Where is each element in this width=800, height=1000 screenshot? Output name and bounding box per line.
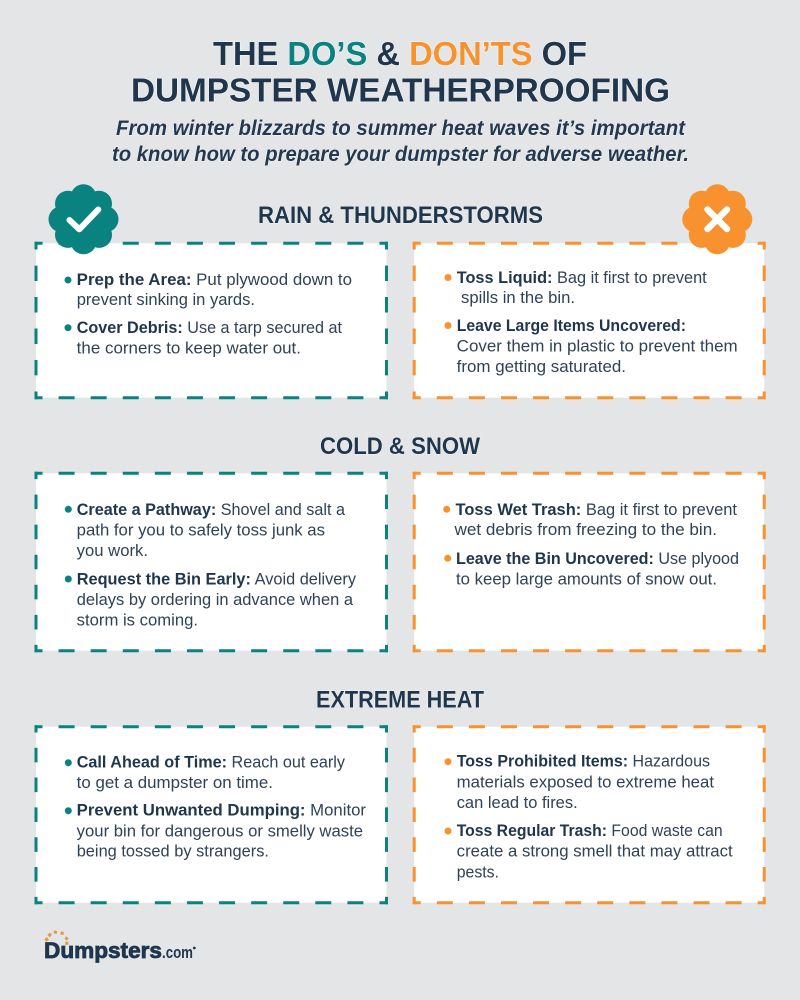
panel: rain don'ts: Leave Large Items Uncovered: bbox=[457, 316, 686, 335]
panel: cold do's: Create a Pathway: Shovel and salt a bbox=[77, 500, 346, 519]
logo: Dumpsters.com: .com bbox=[162, 943, 193, 962]
panel: rain do's: Cover Debris: Use a tarp secured at bbox=[77, 318, 342, 337]
panel: cold do's: you work. bbox=[77, 541, 148, 560]
panel: heat do's: to get a dumpster on time. bbox=[77, 773, 273, 792]
panel: rain don'ts: Cover them in plastic to prevent them bbox=[457, 336, 738, 355]
title bbox=[131, 36, 670, 110]
panel: heat don'ts: materials exposed to extreme heat bbox=[457, 772, 714, 791]
panel: rain do's: Prep the Area: Put plywood down to bbox=[77, 270, 352, 289]
panel: cold don'ts bbox=[413, 472, 766, 652]
panel: cold don'ts: wet debris from freezing to the bin. bbox=[453, 520, 717, 539]
title: THE DO’S & DON’TS OF bbox=[213, 36, 587, 73]
panel: heat don'ts: can lead to fires. bbox=[457, 793, 578, 812]
panel: heat do's bbox=[34, 725, 388, 904]
panel: cold don'ts: Leave the Bin Uncovered: Use plyood bbox=[456, 549, 739, 568]
panel: heat do's: being tossed by strangers. bbox=[77, 842, 269, 861]
panel: rain don'ts bbox=[413, 242, 766, 399]
panel: cold do's: storm is coming. bbox=[77, 611, 198, 630]
panel: cold do's bbox=[34, 472, 388, 652]
subtitle bbox=[112, 117, 689, 166]
icon: orange x badge bbox=[682, 184, 752, 254]
panel: heat don'ts: Toss Regular Trash: Food waste can bbox=[457, 821, 723, 840]
heading: rain and thunderstorms: RAIN & THUNDERSTORMS bbox=[258, 202, 543, 229]
logo: Dumpsters.com bbox=[44, 931, 196, 963]
panel: heat don'ts: pests. bbox=[457, 862, 499, 881]
panel: rain do's bbox=[34, 242, 388, 399]
panel: cold do's: path for you to safely toss junk as bbox=[77, 520, 325, 539]
panel: rain don'ts: from getting saturated. bbox=[457, 357, 626, 376]
panel: heat do's: Call Ahead of Time: Reach out early bbox=[77, 753, 346, 772]
heading: cold and snow: COLD & SNOW bbox=[320, 433, 481, 460]
panel: cold don'ts: to keep large amounts of snow out. bbox=[456, 569, 717, 588]
panel: cold don'ts: Toss Wet Trash: Bag it first to prevent bbox=[456, 500, 737, 519]
panel: heat don'ts: create a strong smell that may attract bbox=[457, 842, 733, 861]
logo: Dumpsters.com: Dumpsters bbox=[44, 938, 162, 963]
panel: rain don'ts: spills in the bin. bbox=[461, 288, 575, 307]
panel: cold do's: delays by ordering in advance when a bbox=[77, 590, 354, 609]
panel: cold do's: Request the Bin Early: Avoid delivery bbox=[77, 569, 357, 588]
panel: heat do's: your bin for dangerous or smelly waste bbox=[77, 822, 363, 841]
heading: extreme heat: EXTREME HEAT bbox=[316, 687, 484, 714]
panel: heat don'ts bbox=[413, 725, 766, 904]
subtitle: to know how to prepare your dumpster for adverse weather. bbox=[112, 143, 689, 166]
panel: rain do's: the corners to keep water out. bbox=[77, 338, 301, 358]
panel: heat don'ts: Toss Prohibited Items: Hazardous bbox=[457, 752, 710, 771]
panel: rain do's: prevent sinking in yards. bbox=[77, 290, 255, 309]
panel: rain don'ts: Toss Liquid: Bag it first to prevent bbox=[457, 268, 707, 287]
title: DUMPSTER WEATHERPROOFING bbox=[131, 72, 670, 110]
icon: teal check badge bbox=[48, 184, 118, 254]
panel: heat do's: Prevent Unwanted Dumping: Monitor bbox=[77, 801, 366, 820]
subtitle: From winter blizzards to summer heat waves it’s important bbox=[116, 117, 686, 140]
